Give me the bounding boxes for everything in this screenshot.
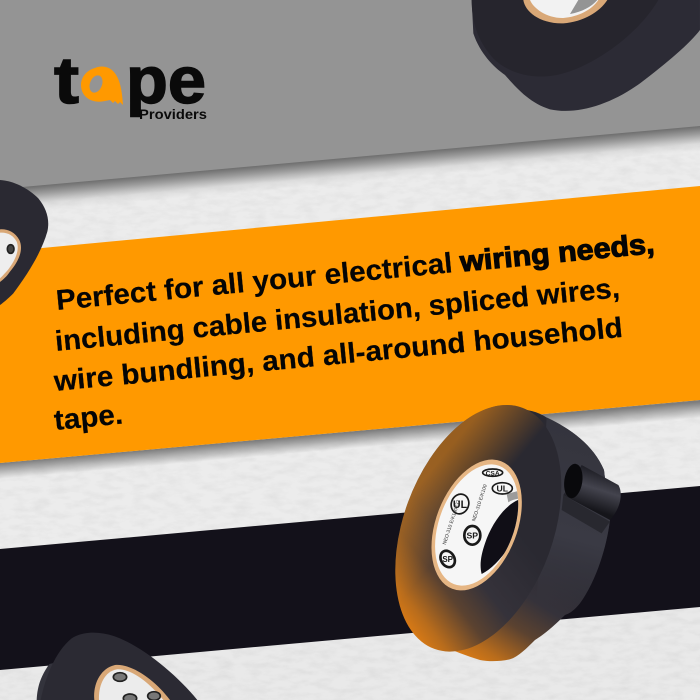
tape body <box>0 180 48 305</box>
see-through hole <box>480 491 518 574</box>
printed rating text: NEO-310 E/K100 <box>471 484 489 522</box>
tape roll: bottom left <box>37 633 197 700</box>
logo letter t: t <box>54 43 79 117</box>
core paper <box>99 669 163 700</box>
print mark <box>7 245 14 253</box>
side wall <box>472 0 700 111</box>
side wall <box>537 417 610 615</box>
front face <box>41 633 197 700</box>
line 4: tape. <box>53 399 124 437</box>
logo letters pe: pe <box>126 43 206 117</box>
logo icon: orange tape roll <box>81 67 123 105</box>
orange rim glow <box>364 382 593 675</box>
lower white band <box>0 598 700 700</box>
line 1 regular: Perfect for all your electrical <box>55 247 454 317</box>
side wall <box>37 660 77 700</box>
SP mark lower: SP <box>442 555 454 564</box>
tape roll: large centre right <box>395 405 621 662</box>
printed rating text: NEO-310 E/K100232 <box>442 499 462 546</box>
tape roll: left edge <box>0 180 48 305</box>
print mark <box>123 694 137 700</box>
core ring <box>414 447 539 603</box>
textured white band <box>0 126 700 560</box>
core paper <box>530 0 598 18</box>
line 3: wire bundling, and all-around household <box>52 312 624 398</box>
SP mark middle: SP <box>467 531 478 541</box>
overall silhouette <box>440 410 610 661</box>
core ring <box>94 665 170 700</box>
core print <box>438 469 512 570</box>
print mark <box>113 673 127 681</box>
core paper <box>0 233 18 278</box>
side notch tube <box>562 463 621 520</box>
tape roll: top right <box>472 0 700 111</box>
front face <box>472 0 658 76</box>
core ring <box>0 229 21 282</box>
orange banner shadow <box>0 400 700 481</box>
see-through hole <box>570 0 597 14</box>
logo <box>54 43 207 122</box>
CSA mark top: CSA <box>486 470 500 477</box>
orange banner <box>0 186 700 463</box>
front face <box>364 382 593 675</box>
print mark <box>148 692 160 700</box>
core paper <box>419 452 534 597</box>
core ring <box>523 0 607 23</box>
UL mark large: UL <box>453 499 468 511</box>
line 1 emphasis: wiring needs, <box>458 228 656 279</box>
UL mark upper: UL <box>497 484 509 494</box>
line 2: including cable insulation, spliced wires, <box>54 272 621 358</box>
black stripe <box>0 486 700 670</box>
banner text <box>52 228 656 437</box>
tube shadow <box>562 495 610 533</box>
logo subtitle: Providers <box>139 106 207 122</box>
